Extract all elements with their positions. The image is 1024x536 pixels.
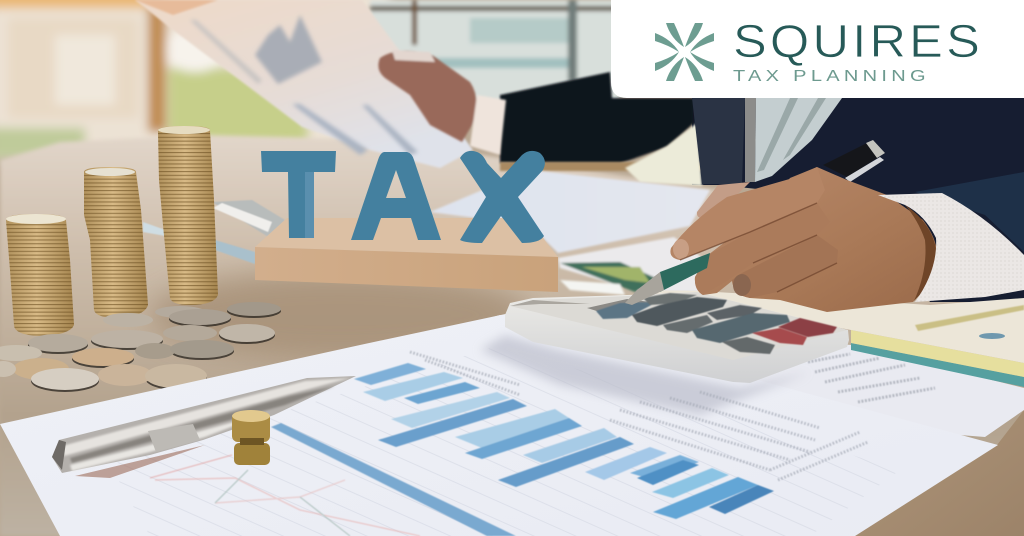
ring finger — [732, 235, 838, 298]
middle finger — [695, 203, 830, 295]
letter X — [460, 151, 545, 243]
green pen — [660, 253, 710, 292]
cuff shadow on wrist — [905, 205, 937, 301]
coin stack: tall — [158, 126, 218, 305]
bar chart on report — [354, 363, 774, 519]
faint line chart on report — [150, 455, 420, 536]
small gold coin stack — [232, 410, 270, 465]
shadow of calculator on paper — [480, 335, 810, 415]
long blue divider bar on report — [271, 423, 516, 536]
clipboard clip behind letters — [143, 200, 285, 264]
background: window panes behind the businessman — [370, 0, 620, 105]
coin stack: short — [6, 214, 74, 336]
logo icon: eight petal mark — [655, 23, 714, 81]
printed figures on lower sheet — [808, 354, 935, 402]
black pen end — [823, 140, 885, 177]
index finger — [670, 167, 825, 260]
wooden block base — [255, 218, 558, 292]
hidden back finger — [697, 182, 750, 218]
right hand with pens — [625, 140, 1024, 312]
loose coins on the table — [0, 302, 281, 392]
coin stacks — [6, 126, 218, 336]
logo banner — [611, 0, 1024, 98]
suit body and sleeve — [500, 72, 1024, 302]
silver pen — [52, 376, 356, 478]
letter T — [261, 151, 336, 238]
coin stack: medium — [84, 167, 148, 318]
letter A — [351, 152, 441, 240]
document held up in the air — [135, 0, 473, 168]
background: blurred window and building — [0, 0, 390, 160]
calculator keys — [596, 293, 837, 354]
logo tagline: TAX PLANNING — [733, 67, 930, 84]
wooden table — [0, 135, 1024, 536]
TAX letters — [261, 151, 545, 243]
hand back — [695, 167, 937, 312]
lower paper sheet under calculator — [300, 315, 1024, 437]
dotted figures table on sheet — [410, 352, 868, 480]
logo wordmark: SQUIRES — [733, 16, 983, 67]
calculator — [505, 292, 849, 383]
shirt cuff — [878, 193, 1024, 302]
notebook pages — [640, 290, 1024, 387]
main report sheet — [0, 313, 998, 536]
papers behind the TAX letters — [430, 170, 710, 295]
left hand holding the document — [378, 50, 506, 155]
